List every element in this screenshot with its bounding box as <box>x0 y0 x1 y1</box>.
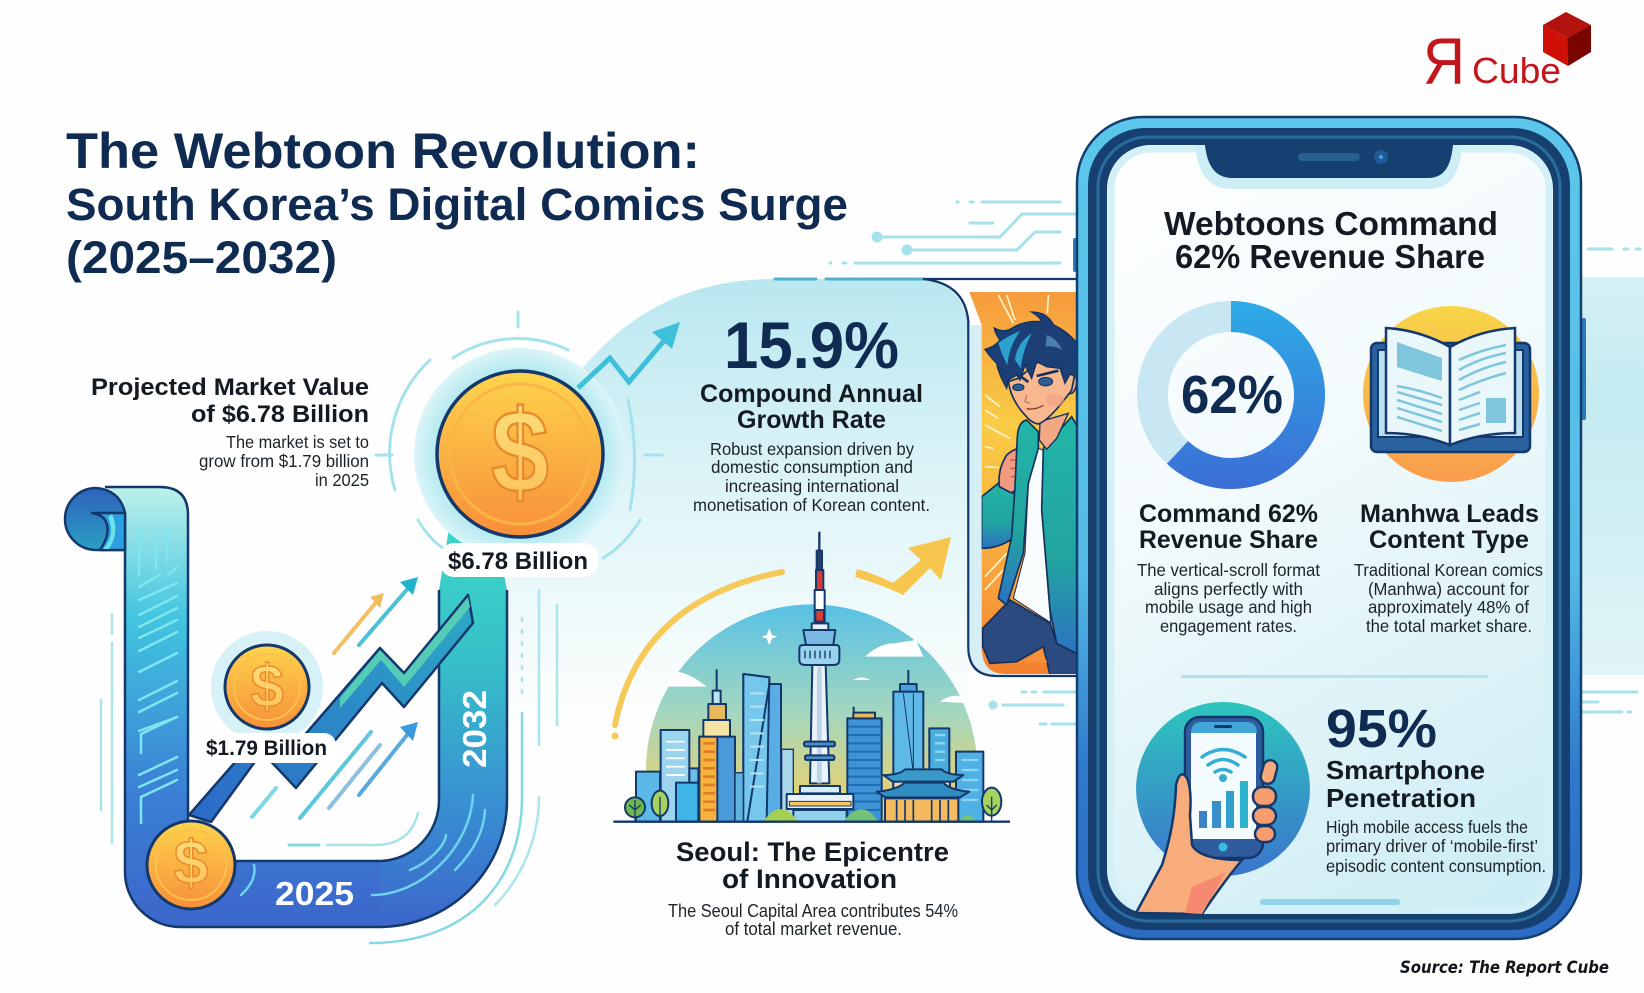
icon: hand holding smartphone <box>1136 702 1310 914</box>
hand <box>998 448 1016 494</box>
text block: Seoul: of Innovation <box>722 864 897 894</box>
scroll roll <box>65 488 125 550</box>
illustration: Seoul skyline <box>613 532 1010 822</box>
backpack strap <box>1063 438 1077 527</box>
text block: projected market value: in 2025 <box>315 470 369 490</box>
sleeve <box>982 483 1018 548</box>
jacket right <box>1042 417 1077 654</box>
temple <box>877 769 969 822</box>
pants <box>983 600 1077 675</box>
glass tower <box>743 674 781 822</box>
text block: compound annual growth rate: increasing international <box>725 476 899 496</box>
light blue panel right of phone <box>1581 277 1644 675</box>
phone screen <box>1107 145 1553 914</box>
text block: compound annual growth rate: Robust expansion driven by <box>710 439 914 459</box>
title: (2025–2032) <box>66 232 337 283</box>
phone heading <box>1164 205 1498 275</box>
icon: yellow arc and arrow <box>612 537 951 740</box>
logo: RCube: Я <box>1423 24 1465 98</box>
ribbon right section <box>360 510 507 927</box>
text block: manhwa leads content type: the total market share. <box>1366 616 1532 636</box>
hair <box>985 312 1078 388</box>
text block: manhwa leads content type: Manhwa Leads <box>1360 500 1539 528</box>
text block: projected market value: The market is set to <box>226 432 369 452</box>
growth ribbon chart <box>65 312 662 943</box>
phone <box>1073 117 1586 939</box>
light blue central backdrop panel <box>507 279 968 730</box>
start coin 2025: $ <box>174 829 208 898</box>
text block: manhwa leads content type: Content Type <box>1369 526 1529 554</box>
title <box>66 123 848 283</box>
coin $1.79 billion: $ <box>250 653 284 720</box>
left buildings <box>636 772 660 822</box>
label $1.79 billion: $1.79 Billion <box>206 736 327 760</box>
decorative pale lines around ribbon <box>101 590 557 943</box>
ribbon outline <box>105 487 507 927</box>
text block: projected market value: Projected Market Value <box>91 374 369 401</box>
sky dome <box>646 604 977 822</box>
comic frame <box>923 279 1080 676</box>
text block: command 62% revenue share: Revenue Share <box>1139 526 1318 554</box>
label 2032: 2032 <box>456 690 493 768</box>
text block: command 62% revenue share: mobile usage and high <box>1145 597 1312 617</box>
label $6.78 billion: $6.78 Billion <box>448 548 588 575</box>
head <box>985 312 1078 424</box>
text block: compound annual growth rate: domestic consumption and <box>711 457 913 477</box>
title: South Korea’s Digital Comics Surge <box>66 179 848 230</box>
text block: manhwa leads content type: approximately 48% of <box>1368 597 1529 617</box>
text block: compound annual growth rate: monetisation of Korean content. <box>693 495 930 515</box>
text block: 95% smartphone penetration: episodic content consumption. <box>1326 856 1546 876</box>
hair highlights <box>998 331 1032 368</box>
neck <box>1039 413 1068 449</box>
text block: compound annual growth rate <box>693 308 930 515</box>
ribbon strip details <box>139 526 177 823</box>
text block: compound annual growth rate: Compound Annual <box>700 380 923 408</box>
text block: command 62% revenue share <box>1137 500 1320 636</box>
text block: 95% smartphone penetration: 95% <box>1326 699 1437 759</box>
face <box>1008 362 1075 424</box>
circuit lines <box>775 202 1640 724</box>
coin $6.78 billion <box>376 312 662 560</box>
clouds <box>663 640 970 703</box>
phone side buttons <box>1073 238 1586 420</box>
small trend arrows <box>252 577 418 818</box>
text block: command 62% revenue share: The vertical-scroll format <box>1137 560 1320 580</box>
ribbon left and bottom section <box>105 487 380 927</box>
logo: RCube: Cube <box>1472 50 1561 91</box>
comic rays <box>985 295 1048 590</box>
text block: projected market value: of $6.78 Billion <box>191 401 369 428</box>
text block: manhwa leads content type: Traditional Korean comics <box>1354 560 1543 580</box>
source note: Source: The Report Cube <box>1400 958 1609 977</box>
text block: Seoul: of total market revenue. <box>725 919 902 939</box>
phone heading: Webtoons Command <box>1164 205 1498 242</box>
text block: 95% smartphone penetration: primary driver of ‘mobile-first’ <box>1326 836 1538 856</box>
text block: 95% smartphone penetration: High mobile access fuels the <box>1326 817 1528 837</box>
text block: 95% smartphone penetration: Penetration <box>1326 783 1476 813</box>
title: The Webtoon Revolution: <box>66 123 700 179</box>
phone heading: 62% Revenue Share <box>1175 238 1485 275</box>
phone body <box>1077 117 1581 939</box>
text block: 95% smartphone penetration: Smartphone <box>1326 755 1485 785</box>
text block: projected market value: grow from $1.79 billion <box>199 451 369 471</box>
shirt <box>1013 447 1055 623</box>
logo: RCube <box>1423 12 1591 98</box>
text block: compound annual growth rate: Growth Rate <box>737 406 886 434</box>
coin $1.79 billion <box>211 631 323 743</box>
trees and bushes <box>625 788 1001 822</box>
ribbon bottom curves <box>241 795 485 895</box>
right buildings <box>847 718 882 822</box>
ear <box>1070 378 1076 394</box>
orange tower <box>699 737 735 822</box>
donut chart 62% <box>1152 316 1310 474</box>
text block: Seoul: The Seoul Capital Area contributes 54% <box>668 901 958 921</box>
comic panel with character <box>923 279 1080 677</box>
text block: manhwa leads content type: (Manhwa) account for <box>1368 579 1529 599</box>
label 2025: 2025 <box>275 875 354 912</box>
donut chart 62%: 62% <box>1181 365 1283 425</box>
icon: cyan growth arrow <box>578 322 680 388</box>
start coin 2025 <box>147 821 235 909</box>
text block: Seoul <box>668 837 958 939</box>
text block: manhwa leads content type <box>1354 500 1543 636</box>
coin $6.78 billion: $ <box>491 386 549 518</box>
text block: projected market value <box>91 374 369 490</box>
jacket left <box>998 420 1038 605</box>
text block: 95% smartphone penetration <box>1326 699 1546 876</box>
text block: compound annual growth rate: 15.9% <box>724 308 899 382</box>
text block: Seoul: Seoul: The Epicentre <box>676 837 949 867</box>
text block: command 62% revenue share: engagement rates. <box>1160 616 1297 636</box>
text block: command 62% revenue share: aligns perfectly with <box>1154 579 1303 599</box>
text block: command 62% revenue share: Command 62% <box>1139 500 1318 528</box>
phone notch <box>1195 145 1462 189</box>
Namsan tower <box>787 532 853 822</box>
icon: open book <box>1363 306 1539 482</box>
ground line <box>613 818 1010 825</box>
zigzag growth arrow <box>189 595 473 822</box>
eyes and mouth <box>1011 369 1058 409</box>
